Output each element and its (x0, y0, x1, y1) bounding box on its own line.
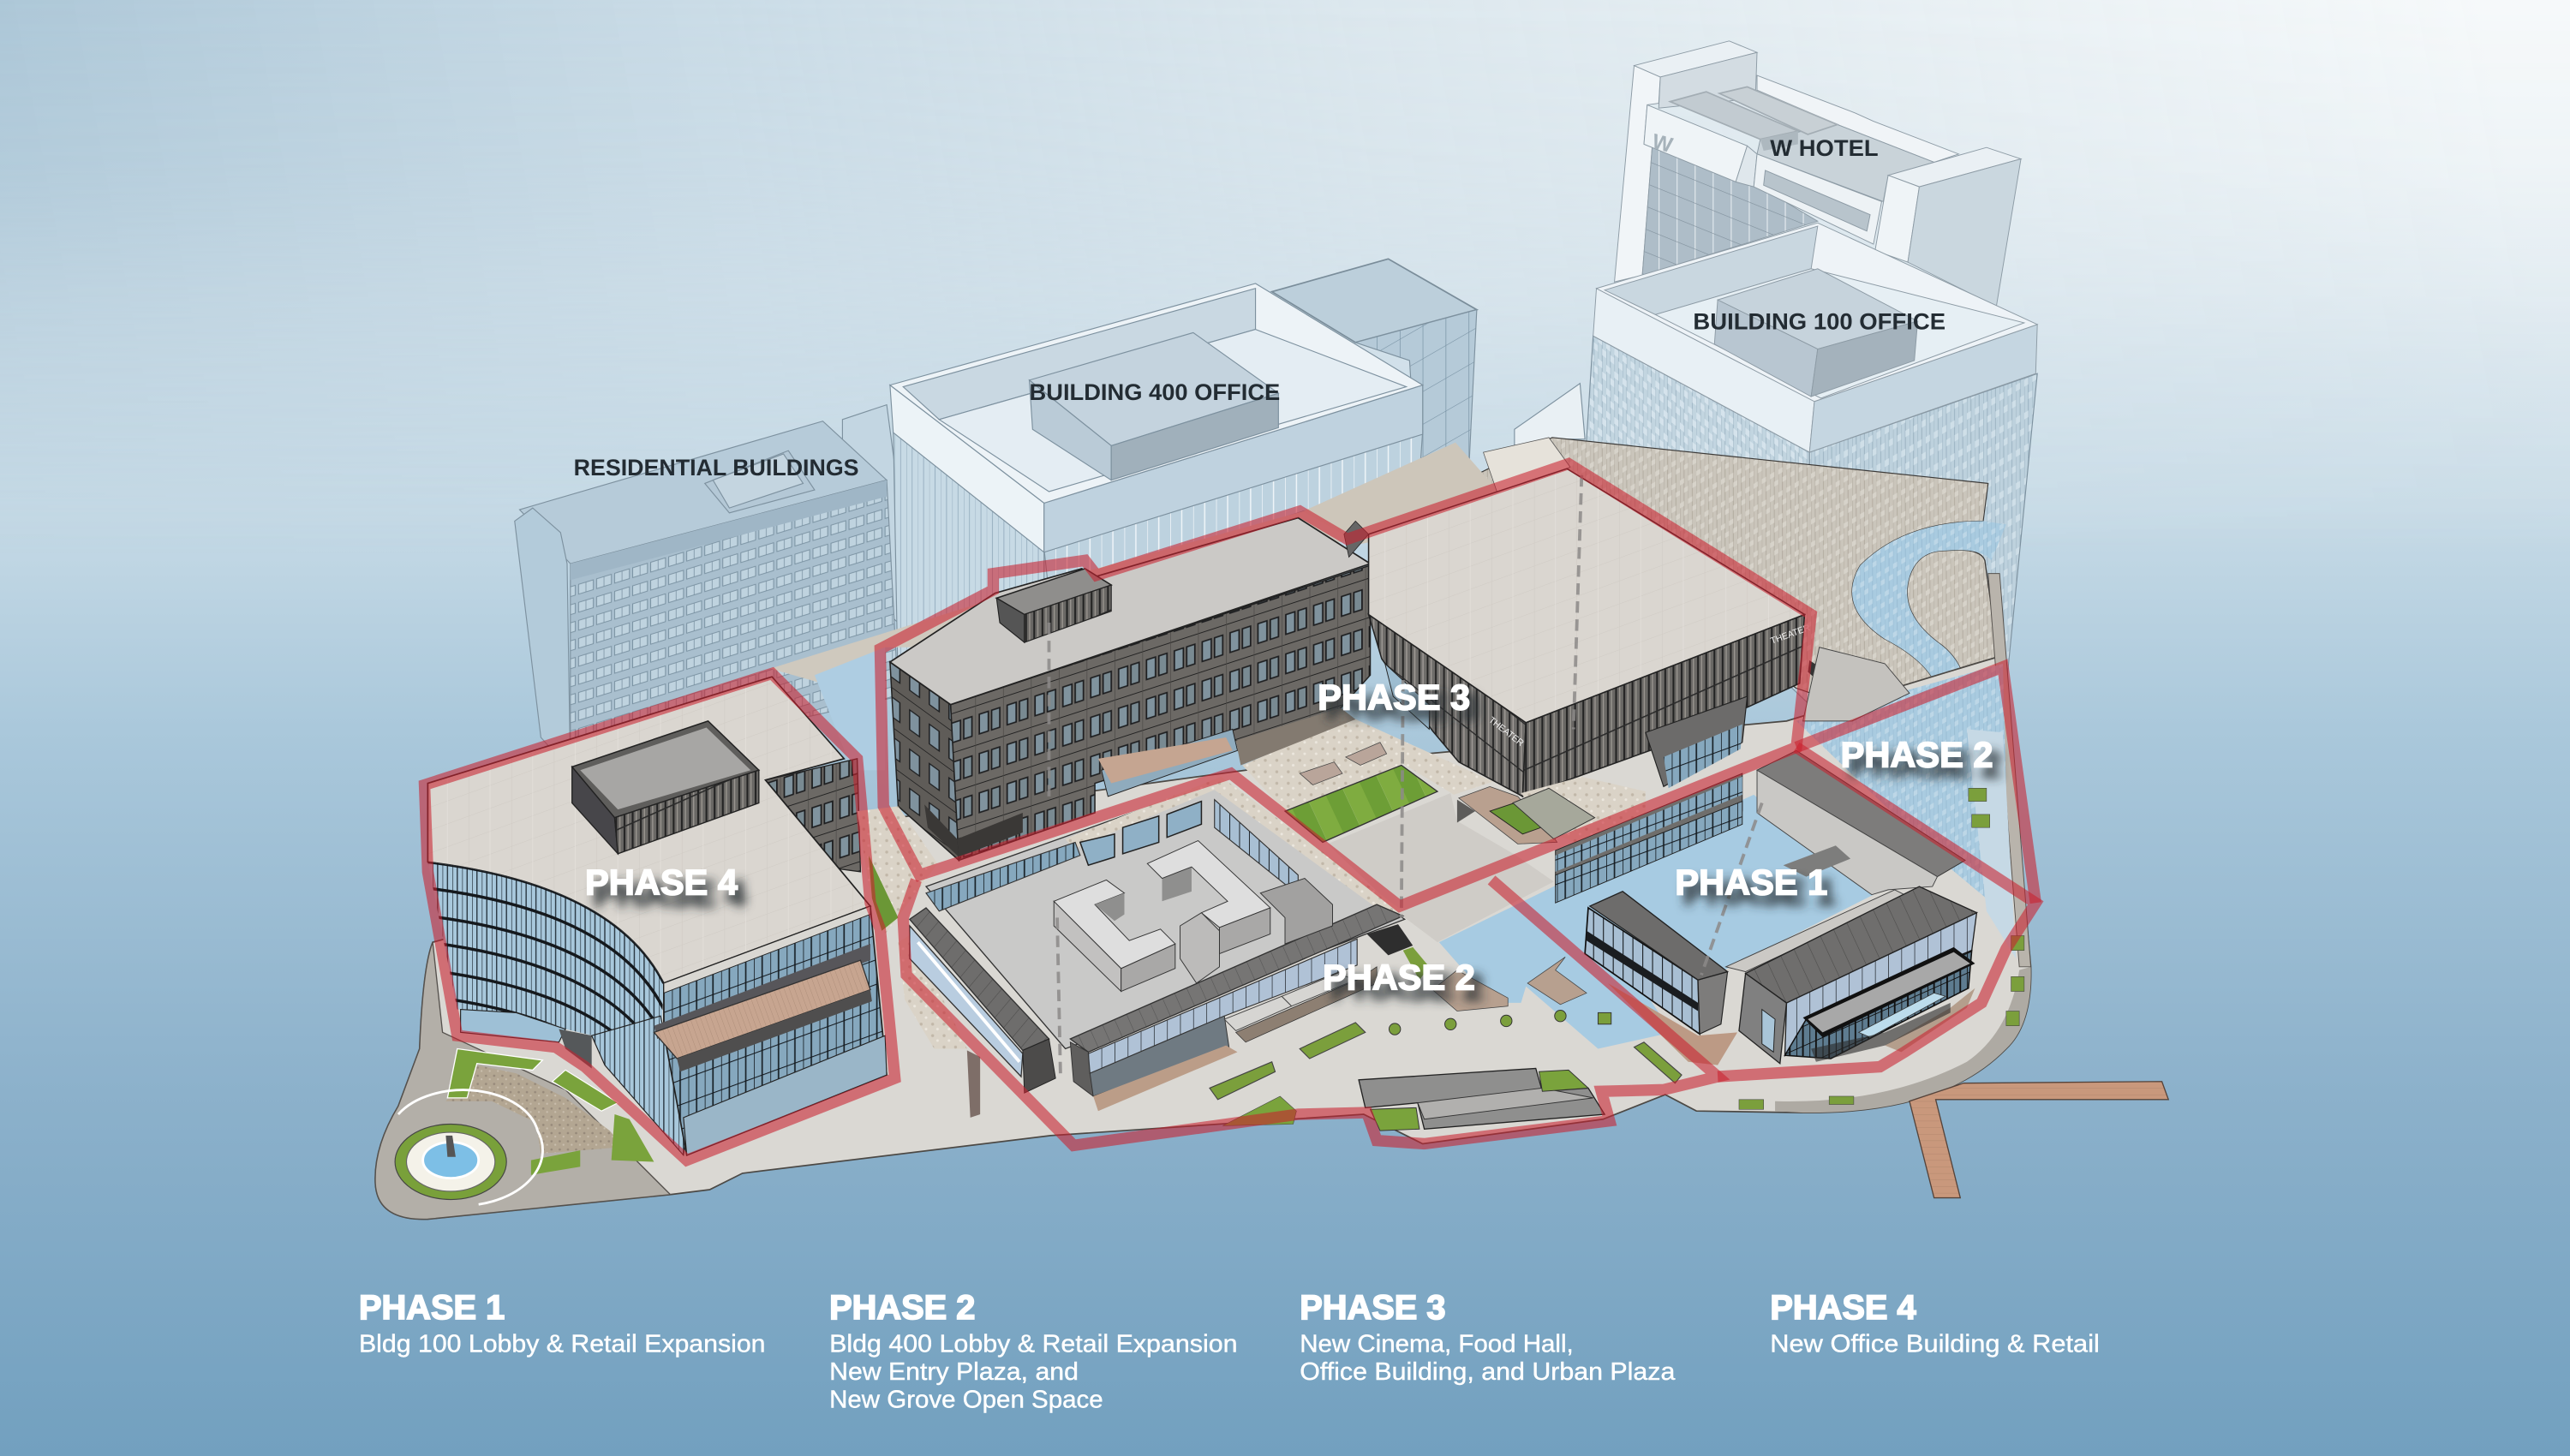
phase 2 upper outline (1796, 667, 2035, 903)
phase 3 office building (890, 518, 1370, 860)
entry plaza planters and stair (967, 1011, 1682, 1131)
label: w hotel: W HOTEL (1770, 135, 1879, 161)
legend: phase 2: New Entry Plaza, and (829, 1358, 1079, 1386)
far terrace overlay (770, 438, 2006, 770)
legend: phase 1: Bldg 100 Lobby & Retail Expansion (359, 1330, 765, 1358)
map label: phase 2 plaza: PHASE 2 (1323, 958, 1475, 998)
map label: phase 1: PHASE 1 (1675, 862, 1827, 903)
phase 3 cinema podium: THEATER (1769, 623, 1812, 647)
phase 1 outline (1718, 747, 2035, 1077)
w hotel (1615, 41, 2021, 307)
map label: phase 4: PHASE 4 (585, 862, 738, 903)
fountain garden (375, 942, 671, 1220)
legend: phase 2: Bldg 400 Lobby & Retail Expansion (829, 1330, 1238, 1358)
phase 3 outline (880, 463, 1811, 906)
legend: phase 1 (359, 1288, 765, 1358)
label: residential buildings: RESIDENTIAL BUILDINGS (574, 455, 859, 480)
w hotel: W (1650, 129, 1676, 158)
legend: phase 4 (1770, 1288, 2100, 1358)
legend: phase 3: Office Building, and Urban Plaza (1300, 1358, 1675, 1386)
courtyard water void (1432, 795, 1874, 1065)
ground plaza (375, 574, 2031, 1220)
legend: phase 3: New Cinema, Food Hall, (1300, 1330, 1574, 1358)
phase 1 right building (1739, 886, 1976, 1064)
map label: phase 1: PHASE 1 (1683, 872, 1836, 912)
building 400 rear tower (1272, 259, 1477, 492)
phase 3 cinema podium: THEATER (1486, 715, 1526, 749)
legend: phase 3 (1300, 1288, 1675, 1386)
map label: phase 2 east: PHASE 2 (1841, 734, 1993, 774)
walkway between phase 3 and phase 4 (858, 806, 967, 1048)
phase 4 outline (425, 673, 895, 1161)
map label: phase 3: PHASE 3 (1318, 677, 1470, 717)
building 100 office (1515, 223, 2037, 770)
phase 3 plaza and lawn (1236, 708, 1646, 942)
phase 1 bridge and wing (1556, 750, 1965, 972)
phase 2 central building (910, 777, 1429, 1111)
phase 4 building (418, 677, 887, 1155)
legend: phase 2 (829, 1288, 1238, 1413)
legend: phase 4: PHASE 4 (1770, 1288, 1916, 1327)
map label: phase 2 east: PHASE 2 (1849, 744, 2001, 785)
label: building 400 office: BUILDING 400 OFFICE (1030, 379, 1280, 405)
phase 1 left building (1585, 892, 1728, 1034)
label: building 100 office: BUILDING 100 OFFICE (1693, 309, 1945, 335)
legend: phase 1: PHASE 1 (359, 1288, 505, 1327)
map label: phase 2 plaza: PHASE 2 (1331, 967, 1484, 1007)
building 400 office (890, 283, 1423, 705)
phase 3 cinema podium (1369, 468, 1910, 797)
phase 2 central outline (903, 880, 1718, 1145)
dashed structure lines (1049, 475, 1762, 1073)
wooden pier (1910, 1082, 2168, 1198)
legend: phase 3: PHASE 3 (1300, 1288, 1445, 1327)
legend: phase 2: PHASE 2 (829, 1288, 975, 1327)
residential buildings (515, 405, 898, 770)
legend: phase 4: New Office Building & Retail (1770, 1330, 2100, 1358)
map label: phase 4: PHASE 4 (594, 874, 746, 914)
legend: phase 2: New Grove Open Space (829, 1386, 1103, 1413)
map label: phase 3: PHASE 3 (1326, 687, 1479, 727)
